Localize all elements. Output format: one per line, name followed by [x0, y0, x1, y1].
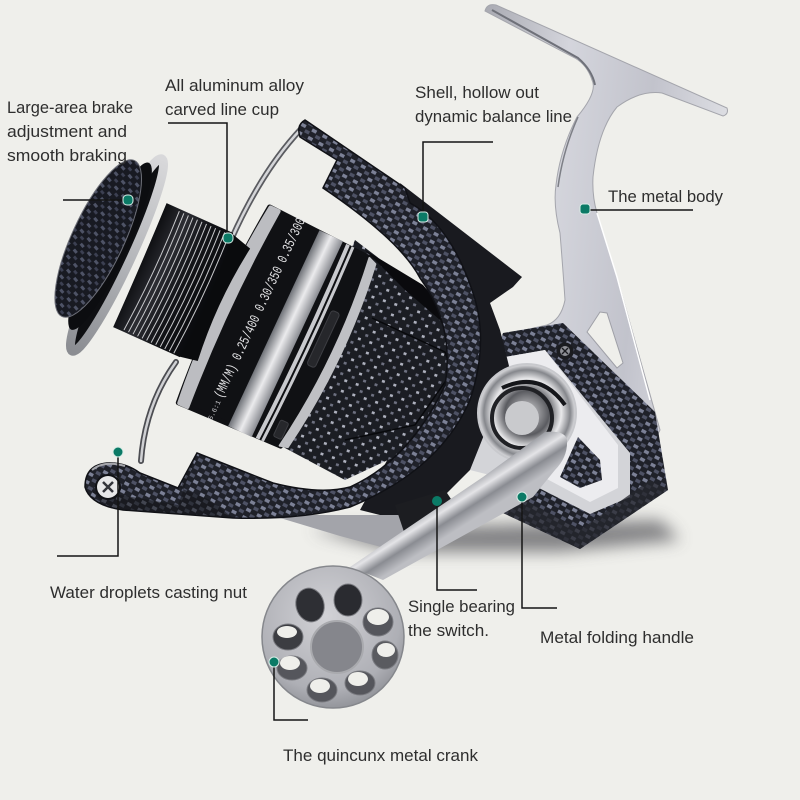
- callout: folding handle: Metal folding handle: [540, 629, 694, 647]
- reel body center: [270, 240, 470, 480]
- front drag knob: [27, 138, 174, 357]
- callout: crank: The quincunx metal crank: [283, 747, 479, 765]
- callout: metal body: [580, 188, 724, 214]
- callout: line cup: All aluminum alloy: [165, 77, 305, 95]
- callout: bearing switch: the switch.: [408, 622, 489, 640]
- main spool: [157, 197, 384, 456]
- metal body stem: [485, 5, 728, 470]
- handle head: [478, 364, 576, 462]
- dark underside: [395, 490, 455, 535]
- folding handle arm: [350, 432, 567, 580]
- fishing reel illustration: [25, 5, 728, 708]
- callout: metal body: The metal body: [608, 188, 724, 206]
- rotor arm carbon band: [85, 120, 481, 518]
- callout: bearing switch: [408, 496, 515, 640]
- callout: brake adjustment: Large-area brake: [7, 99, 133, 117]
- callout: crank: [269, 657, 479, 765]
- ground shadow: [310, 520, 680, 552]
- wire bail arm: [141, 128, 302, 461]
- crank holes: [273, 584, 398, 702]
- crank hub: [311, 621, 363, 673]
- callout: folding handle: [517, 492, 694, 647]
- silver base: [247, 508, 410, 548]
- side plate: [470, 323, 668, 549]
- callout: brake adjustment: smooth braking: [7, 147, 127, 165]
- callout: shell: [415, 84, 572, 222]
- casting nut screw: [95, 474, 121, 500]
- callout: casting nut: Water droplets casting nut: [50, 584, 247, 602]
- quincunx crank knob: [262, 566, 404, 708]
- callout: casting nut: [50, 447, 247, 602]
- line capacity printing: (MM/M) 0.25/400 0.30/350 0.35/300: [212, 216, 310, 401]
- callout: bearing switch: Single bearing: [408, 598, 515, 616]
- callout: shell: dynamic balance line: [415, 108, 572, 126]
- callout: brake adjustment: [7, 99, 133, 205]
- neck: [175, 234, 253, 365]
- callout: shell: Shell, hollow out: [415, 84, 539, 102]
- spool slot: [307, 310, 340, 368]
- body slot: [587, 312, 623, 368]
- screw: [556, 342, 574, 360]
- ribbed line cup: [110, 202, 238, 359]
- callout: line cup: [165, 77, 305, 243]
- spool assembly: [25, 133, 386, 458]
- dark rotor housing: [360, 183, 522, 520]
- callout: brake adjustment: adjustment and: [7, 123, 127, 141]
- gear ratio printing: 5.6:1: [207, 399, 223, 422]
- callout: line cup: carved line cup: [165, 101, 279, 119]
